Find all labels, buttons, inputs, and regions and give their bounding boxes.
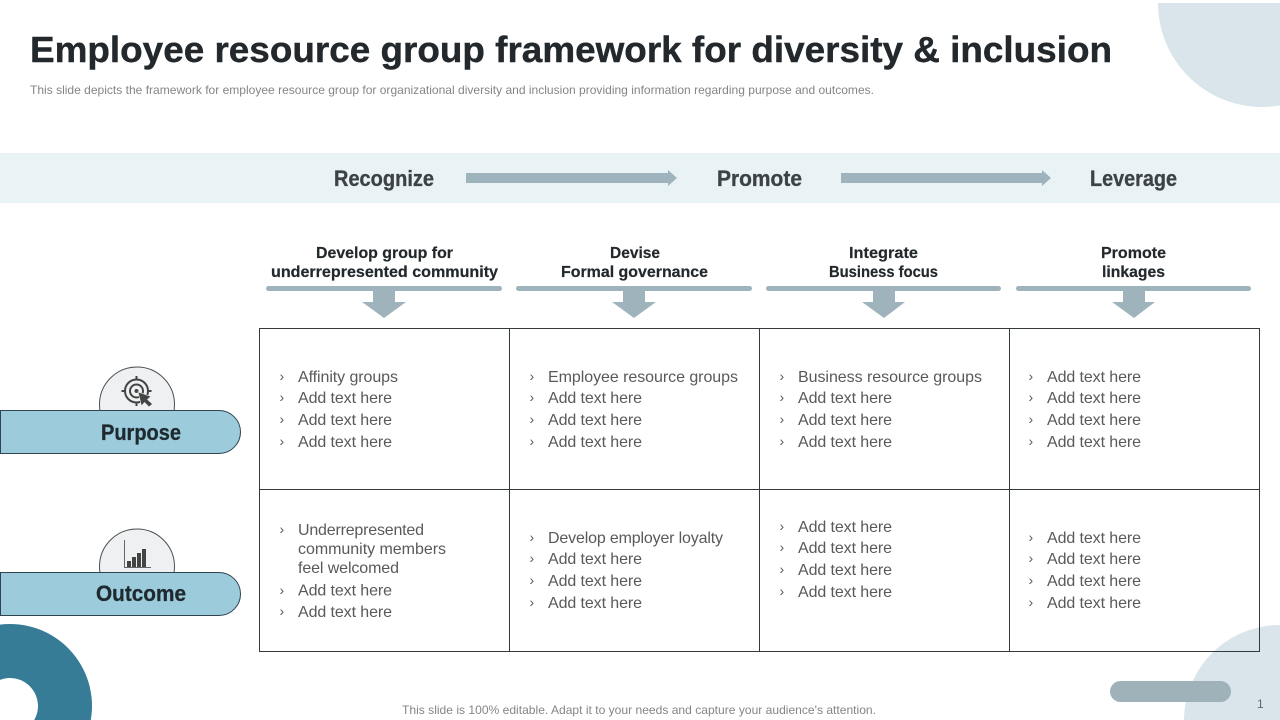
cell: purpose, column 4: ›: [1028, 389, 1034, 405]
footer pill: [1110, 681, 1231, 702]
cell: outcome, column 2: Add text here: [548, 595, 642, 612]
cell: outcome, column 4: Add text here: [1047, 573, 1141, 590]
row label: Purpose: [0, 367, 240, 454]
cell: purpose, column 1: ›: [280, 368, 284, 384]
column header 2: Devise: [610, 245, 660, 262]
column header 3: Integrate: [849, 245, 918, 262]
column header 4: Promote: [1101, 245, 1166, 262]
cell: outcome, column 3: Add text here: [798, 540, 892, 557]
cell: outcome, column 4: Add text here: [1047, 530, 1141, 547]
cell: purpose, column 3: Business resource groups: [798, 369, 982, 386]
cell: outcome, column 3: ›: [780, 518, 784, 534]
cell: purpose, column 1: Add text here: [298, 412, 392, 429]
cell: purpose, column 3: Add text here: [798, 434, 892, 451]
cell: purpose, column 1: Add text here: [298, 434, 392, 451]
decorative donut: bottom left: [0, 624, 92, 720]
row label: Purpose: Purpose: [101, 420, 181, 445]
cell: purpose, column 1: Add text here: [298, 390, 392, 407]
column header 1: Develop group for: [316, 245, 453, 262]
row label: Outcome: [0, 529, 240, 616]
cell: purpose, column 4: Add text here: [1047, 412, 1141, 429]
subtitle: This slide depicts the framework for employee resource group for organizational diversity and inclusion providing information regarding purpose and outcomes.: [30, 83, 874, 97]
decorative circle: top right: [1158, 3, 1280, 107]
column header 3: [766, 245, 1001, 318]
cell: outcome, column 3: Add text here: [798, 562, 892, 579]
cell: outcome, column 1: Add text here: [298, 582, 392, 600]
arrow: Recognize to Promote: [466, 170, 677, 186]
column header 1: underrepresented community: [271, 264, 498, 281]
cell: purpose, column 4: [1028, 368, 1141, 451]
cell: outcome, column 1: ›: [280, 582, 284, 598]
cell: outcome, column 1: Underrepresented: [298, 522, 424, 539]
cell: outcome, column 4: Add text here: [1047, 551, 1141, 568]
cell: outcome, column 4: ›: [1028, 529, 1034, 545]
cell: outcome, column 1: Add text here: [298, 604, 392, 621]
column header 4: linkages: [1102, 264, 1165, 281]
cell: purpose, column 4: ›: [1028, 433, 1034, 449]
cell: purpose, column 4: Add text here: [1047, 434, 1141, 451]
column header 3: Business focus: [829, 264, 938, 281]
stage: Recognize: Recognize: [334, 166, 434, 191]
cell: purpose, column 2: ›: [530, 368, 534, 384]
table grid: [260, 328, 1260, 652]
footer note: This slide is 100% editable. Adapt it to your needs and capture your audience's attention.: [402, 703, 876, 717]
cell: outcome, column 3: Add text here: [798, 519, 892, 536]
cell: outcome, column 3: ›: [780, 561, 784, 577]
decorative circle: bottom right: [1184, 625, 1280, 720]
cell: purpose, column 3: Add text here: [798, 412, 892, 429]
stage: Leverage: Leverage: [1090, 166, 1177, 191]
cell: outcome, column 2: ›: [530, 572, 534, 588]
arrow: Promote to Leverage: [841, 170, 1051, 186]
cell: purpose, column 2: ›: [530, 389, 534, 405]
cell: purpose, column 1: Affinity groups: [298, 369, 398, 386]
cell: outcome, column 3: Add text here: [798, 584, 892, 601]
cell: purpose, column 1: ›: [280, 411, 284, 427]
cell: purpose, column 2: Add text here: [548, 390, 642, 407]
cell: purpose, column 2: Add text here: [548, 412, 642, 429]
cell: outcome, column 2: Add text here: [548, 573, 642, 590]
cell: outcome, column 2: [530, 529, 723, 612]
cell: outcome, column 3: ›: [780, 583, 784, 599]
cell: purpose, column 2: [530, 368, 738, 451]
stage: Promote: Promote: [717, 166, 802, 191]
cell: outcome, column 1: ›: [280, 521, 284, 537]
icon: bar chart: [124, 540, 151, 568]
cell: outcome, column 4: ›: [1028, 572, 1034, 588]
cell: purpose, column 3: ›: [780, 433, 784, 449]
cell: purpose, column 3: Add text here: [798, 390, 892, 407]
cell: outcome, column 4: Add text here: [1047, 595, 1141, 612]
cell: purpose, column 4: Add text here: [1047, 390, 1141, 407]
row label: Outcome: Outcome: [96, 581, 186, 606]
cell: purpose, column 4: Add text here: [1047, 369, 1141, 386]
cell: purpose, column 3: [780, 368, 982, 451]
cell: outcome, column 1: [280, 521, 446, 621]
cell: purpose, column 3: ›: [780, 411, 784, 427]
cell: outcome, column 4: ›: [1028, 550, 1034, 566]
icon: target with cursor: [122, 376, 152, 407]
cell: outcome, column 3: [780, 518, 892, 601]
column header 1: [266, 245, 502, 318]
cell: purpose, column 2: Add text here: [548, 434, 642, 451]
cell: purpose, column 2: ›: [530, 411, 534, 427]
cell: purpose, column 4: ›: [1028, 411, 1034, 427]
cell: purpose, column 3: ›: [780, 368, 784, 384]
cell: outcome, column 1: feel welcomed: [298, 560, 399, 577]
cell: purpose, column 3: ›: [780, 389, 784, 405]
cell: purpose, column 2: ›: [530, 433, 534, 449]
cell: purpose, column 1: ›: [280, 389, 284, 405]
cell: purpose, column 1: ›: [280, 433, 284, 449]
cell: purpose, column 4: ›: [1028, 368, 1034, 384]
cell: outcome, column 2: ›: [530, 594, 534, 610]
cell: outcome, column 3: ›: [780, 539, 784, 555]
column header 2: [516, 245, 752, 318]
cell: outcome, column 2: ›: [530, 550, 534, 566]
cell: outcome, column 1: community members: [298, 541, 446, 558]
column header 4: [1016, 245, 1251, 318]
cell: outcome, column 4: ›: [1028, 594, 1034, 610]
cell: purpose, column 1: [280, 368, 398, 451]
cell: outcome, column 2: Develop employer loyalty: [548, 530, 723, 547]
cell: outcome, column 2: ›: [530, 529, 534, 545]
column header 2: Formal governance: [561, 264, 708, 281]
process band: [0, 153, 1280, 203]
cell: outcome, column 2: Add text here: [548, 551, 642, 568]
cell: outcome, column 4: [1028, 529, 1141, 612]
cell: outcome, column 1: ›: [280, 603, 284, 619]
page number: 1: [1257, 697, 1264, 711]
cell: purpose, column 2: Employee resource groups: [548, 369, 738, 386]
title: Employee resource group framework for diversity & inclusion: [30, 29, 1112, 70]
